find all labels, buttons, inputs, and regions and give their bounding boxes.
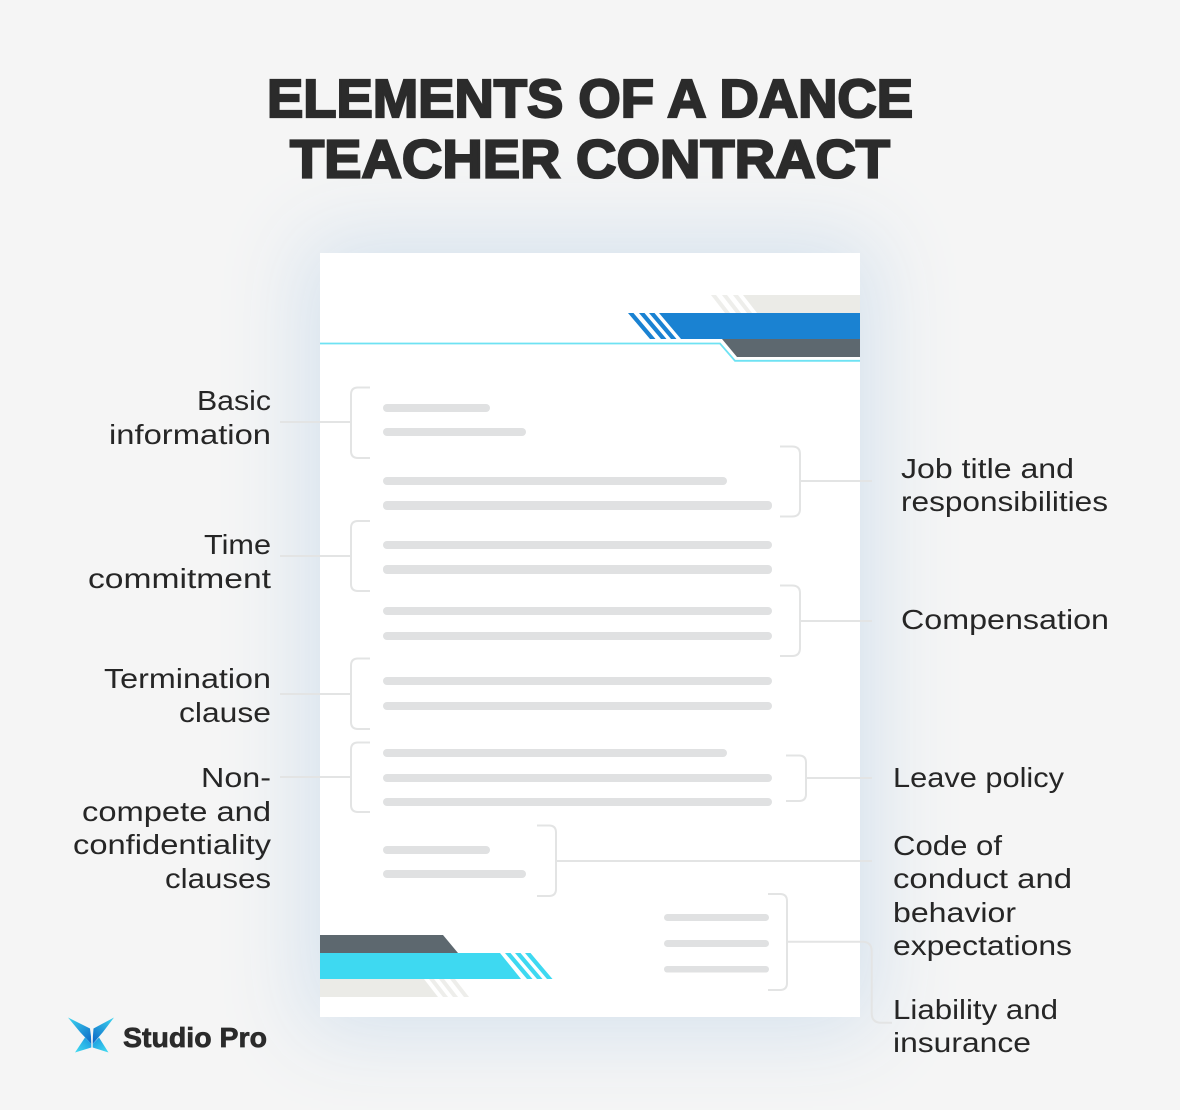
- icon: butterfly mark: [68, 1018, 114, 1052]
- bracket: leave policy: [786, 756, 872, 801]
- label: termination clause: Termination: [104, 663, 271, 694]
- label: time commitment: [88, 529, 271, 594]
- bracket: compensation: [780, 586, 872, 656]
- title: ELEMENTS OF A DANCE: [267, 69, 913, 129]
- label: job title and responsibilities: Job title and: [901, 453, 1074, 484]
- label: non-compete and confidentiality clauses: [73, 762, 271, 894]
- label: non-compete and confidentiality clauses: confidentiality: [73, 829, 271, 860]
- label: liability and insurance: [893, 994, 1058, 1058]
- label: non-compete and confidentiality clauses: Non-: [201, 762, 271, 793]
- label: non-compete and confidentiality clauses: clauses: [165, 863, 271, 894]
- logo: Studio Pro: [68, 1018, 267, 1053]
- panel: contract document: [320, 253, 860, 1017]
- label: termination clause: [104, 663, 271, 728]
- bracket: code of conduct: [537, 826, 872, 896]
- bracket: termination clause: [280, 658, 370, 729]
- label: code of conduct and behavior expectations: Code of: [893, 830, 1002, 861]
- label: basic information: information: [109, 419, 271, 450]
- label: code of conduct and behavior expectations: behavior: [893, 897, 1016, 928]
- label: code of conduct and behavior expectations: expectations: [893, 930, 1072, 961]
- label: termination clause: clause: [179, 697, 271, 728]
- label: time commitment: Time: [204, 529, 271, 560]
- label: job title and responsibilities: responsibilities: [901, 486, 1108, 517]
- label: liability and insurance: insurance: [893, 1027, 1031, 1058]
- label: code of conduct and behavior expectations: conduct and: [893, 863, 1072, 894]
- label: leave policy: Leave policy: [893, 762, 1064, 793]
- bracket: time commitment: [280, 521, 370, 591]
- label: non-compete and confidentiality clauses: compete and: [82, 796, 271, 827]
- logo wordmark: Studio Pro: [123, 1022, 267, 1053]
- title: TEACHER CONTRACT: [290, 130, 890, 190]
- label: basic information: Basic: [197, 385, 271, 416]
- label: basic information: [109, 385, 271, 450]
- title: [267, 69, 913, 190]
- bracket: non-compete: [280, 742, 370, 812]
- label: time commitment: commitment: [88, 563, 271, 594]
- document footer decoration: [320, 935, 552, 997]
- label: compensation: Compensation: [901, 604, 1109, 635]
- bracket: basic information: [280, 388, 370, 458]
- bracket: job title and responsibilities: [780, 446, 872, 516]
- label: job title and responsibilities: [901, 453, 1108, 517]
- document header decoration: [320, 295, 860, 361]
- label: code of conduct and behavior expectations: [893, 830, 1072, 961]
- bracket: liability and insurance: [768, 894, 892, 1023]
- label: liability and insurance: Liability and: [893, 994, 1058, 1025]
- placeholder text lines: [383, 404, 772, 972]
